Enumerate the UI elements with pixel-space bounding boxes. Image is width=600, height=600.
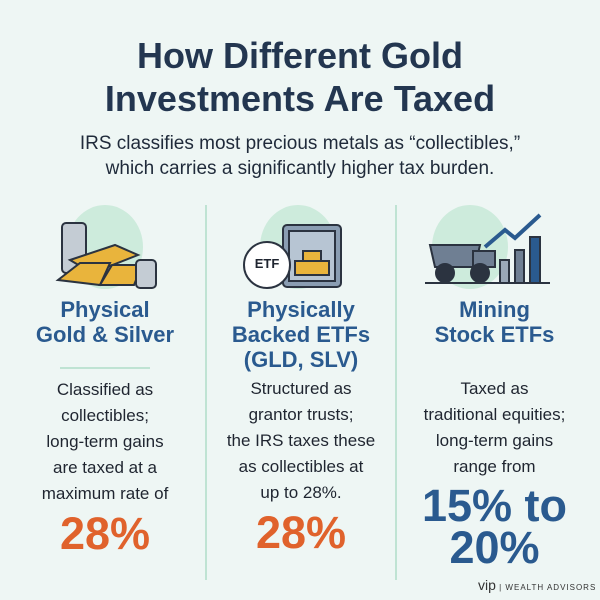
column 3: mining stock ETFs: range from [453,457,536,476]
column 1: physical gold: collectibles; [61,406,149,425]
icon: ETF safe: ETF [255,256,279,271]
column 2: physically backed ETFs: as collectibles at [239,457,363,476]
column 1: physical gold: long-term gains [46,432,164,451]
column 1: physical gold: maximum rate of [42,484,168,503]
column 1: physical gold: are taxed at a [53,458,157,477]
column 2: physically backed ETFs: (GLD, SLV) [244,347,358,372]
subtitle: IRS classifies most precious metals as “collectibles,” [80,133,520,154]
subtitle: which carries a significantly higher tax burden. [106,158,494,179]
column 2: physically backed ETFs: the IRS taxes these [227,431,375,450]
column 1: physical gold: Classified as [57,380,153,399]
column 2: physically backed ETFs: grantor trusts; [249,405,353,424]
column 1: physical gold: 28% [60,508,150,559]
column 3: mining stock ETFs: Mining [459,297,530,322]
icon: gold bars and coins [56,205,157,289]
column 3: mining stock ETFs: traditional equities; [424,405,565,424]
column 2: physically backed ETFs: Backed ETFs [232,322,370,347]
column 3: mining stock ETFs: Stock ETFs [435,322,554,347]
icon: mining truck and chart [425,205,550,289]
column 3: mining stock ETFs [422,297,567,573]
column 1: physical gold: Gold & Silver [36,322,174,347]
column 3: mining stock ETFs: 15% to [422,480,567,531]
column 3: mining stock ETFs: 20% [449,522,540,573]
column 1: physical gold [36,297,174,559]
column 2: physically backed ETFs: Structured as [250,379,352,398]
column 3: mining stock ETFs: long-term gains [436,431,553,450]
column 1: physical gold: Physical [60,297,150,322]
title: How Different Gold [137,35,463,76]
logo: vip | WEALTH ADVISORS [478,577,596,593]
column 2: physically backed ETFs [227,297,375,558]
column 2: physically backed ETFs: Physically [247,297,355,322]
icon: ETF safe [243,205,342,289]
column 3: mining stock ETFs: Taxed as [460,379,529,398]
title [105,35,495,119]
subtitle [80,133,520,179]
column 2: physically backed ETFs: 28% [256,507,346,558]
column 2: physically backed ETFs: up to 28%. [260,483,342,502]
title: Investments Are Taxed [105,78,495,119]
